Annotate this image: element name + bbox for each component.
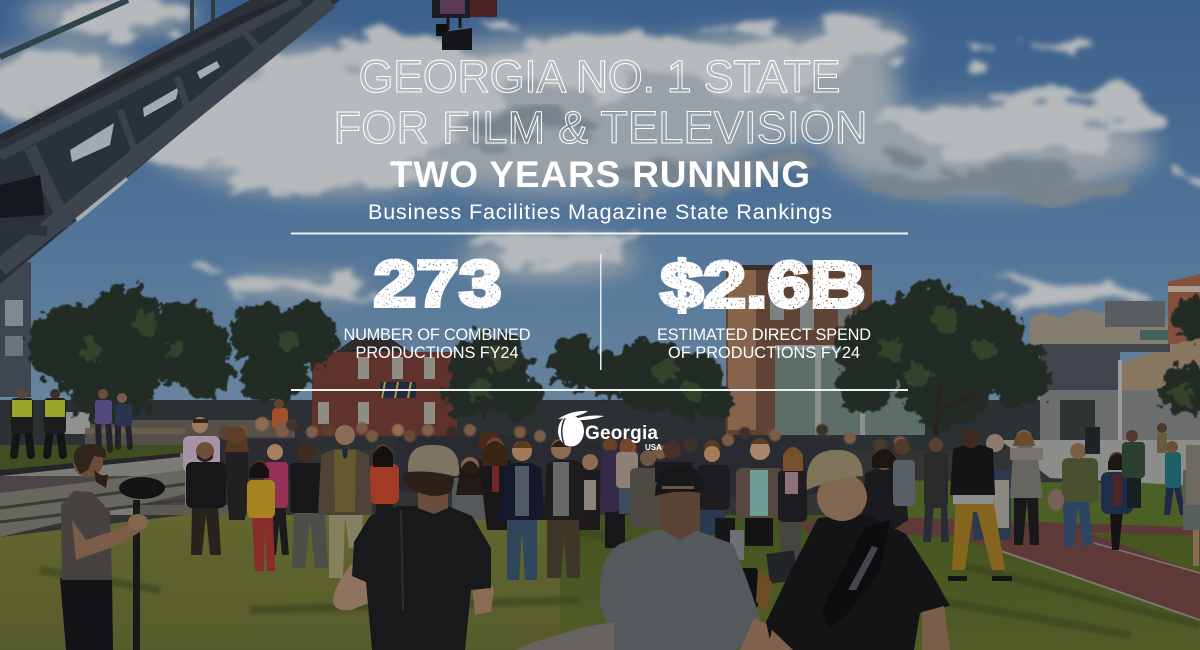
person: yellow sweater woman bbox=[247, 460, 275, 571]
person: green jacket woman bbox=[1048, 443, 1098, 546]
stat: 273 productions bbox=[344, 247, 530, 362]
vertical divider bbox=[600, 254, 602, 370]
person: olive striped dress bbox=[630, 450, 666, 528]
stat: 273 productions: 273 bbox=[374, 247, 502, 320]
crowd: back rows bbox=[205, 417, 906, 498]
person: navy jacket woman bbox=[1101, 452, 1133, 550]
person: gray jacket bbox=[893, 439, 915, 506]
stat: $2.6B direct spend: OF PRODUCTIONS FY24 bbox=[668, 344, 860, 362]
foreground crew: camera assistant in tan cap, black tee with strap bbox=[766, 450, 950, 650]
person: woman in gray dress bbox=[1010, 430, 1043, 545]
person: dark dress woman bbox=[479, 438, 511, 530]
person: woman with bag bbox=[697, 446, 730, 535]
upper support rods bbox=[0, 0, 128, 57]
stat: 273 productions: NUMBER OF COMBINED bbox=[344, 326, 530, 344]
person: woman in black bbox=[225, 426, 249, 520]
title: Georgia No. 1 State for Film & Television: FOR FILM & TELEVISION bbox=[334, 102, 868, 153]
logo: Georgia USA peach: Georgia bbox=[585, 423, 658, 444]
person: pale shirt man bbox=[183, 417, 220, 472]
logo: Georgia USA peach bbox=[558, 411, 662, 452]
foreground crew: cameraman in gray shirt bbox=[516, 466, 772, 650]
stat: $2.6B direct spend: ESTIMATED DIRECT SPEND bbox=[657, 326, 871, 344]
person: black sweater man bbox=[186, 442, 226, 555]
camera equipment bbox=[690, 518, 798, 612]
center brick building bbox=[726, 265, 925, 435]
blimp microphone bbox=[119, 477, 165, 499]
stat: $2.6B direct spend: $2.6B bbox=[660, 248, 866, 321]
subtitle: two years running: TWO YEARS RUNNING bbox=[390, 154, 810, 195]
logo: Georgia USA peach: USA bbox=[645, 443, 662, 452]
person: woman in black jacket bbox=[862, 449, 908, 528]
title: Georgia No. 1 State for Film & Television: GEORGIA NO. 1 STATE bbox=[358, 51, 840, 102]
crowd: extras on the left bbox=[183, 417, 600, 580]
sky bbox=[0, 0, 1200, 430]
stat: 273 productions: PRODUCTIONS FY24 bbox=[356, 344, 518, 362]
person: distant man by bin bbox=[1085, 423, 1167, 454]
bottom rule bbox=[291, 389, 908, 391]
security officers and bystanders at the far left bbox=[11, 389, 288, 455]
camera on crane bbox=[432, 0, 497, 50]
foreground crew: cameraman in beige cap, black tee bbox=[333, 445, 494, 650]
person: jacket man, brown trousers bbox=[543, 439, 586, 578]
person: green sweater man bbox=[1122, 430, 1145, 508]
person: dark suit man bbox=[655, 441, 693, 482]
crowd: right of center bbox=[601, 423, 1200, 581]
person: orange jacket woman bbox=[370, 444, 399, 532]
clouds bbox=[0, 0, 1200, 306]
stat: $2.6B direct spend bbox=[657, 248, 871, 362]
trees bbox=[28, 284, 1200, 435]
truss body bbox=[0, 0, 340, 284]
person: jacket man, jeans bbox=[498, 441, 545, 580]
sky gaps in truss bbox=[70, 38, 283, 222]
background building: far right skyline bbox=[1030, 274, 1200, 455]
boom operator with microphone bbox=[60, 444, 165, 650]
person: teal top bbox=[1164, 441, 1186, 515]
person: scarf woman bbox=[778, 447, 807, 568]
person: suit man bbox=[318, 425, 372, 578]
person: dark jacket woman bbox=[923, 438, 949, 542]
person: woman at center bbox=[579, 454, 600, 530]
person: far right edge bbox=[1183, 445, 1200, 566]
ground: grass, path and steps bbox=[0, 440, 1200, 650]
source: Business Facilities Magazine: Business Facilities Magazine State Rankings bbox=[368, 200, 832, 224]
person: woman in gray bbox=[452, 457, 488, 520]
person: mustard trousers man bbox=[948, 428, 1012, 581]
crane arm bbox=[0, 0, 340, 284]
boom pole bbox=[133, 500, 140, 650]
person: woman in apron bbox=[973, 434, 1011, 540]
left brick building bbox=[312, 338, 457, 436]
background building: far left bbox=[0, 262, 31, 397]
top rule bbox=[291, 232, 908, 234]
person: purple top bbox=[601, 438, 639, 548]
person: black shirt man bbox=[290, 444, 328, 568]
person: woman in pink bbox=[264, 444, 289, 555]
title: Georgia No. 1 State for Film & Television bbox=[334, 51, 868, 153]
person: plaid shirt woman bbox=[736, 438, 784, 546]
street-level backdrop bbox=[0, 400, 1200, 450]
